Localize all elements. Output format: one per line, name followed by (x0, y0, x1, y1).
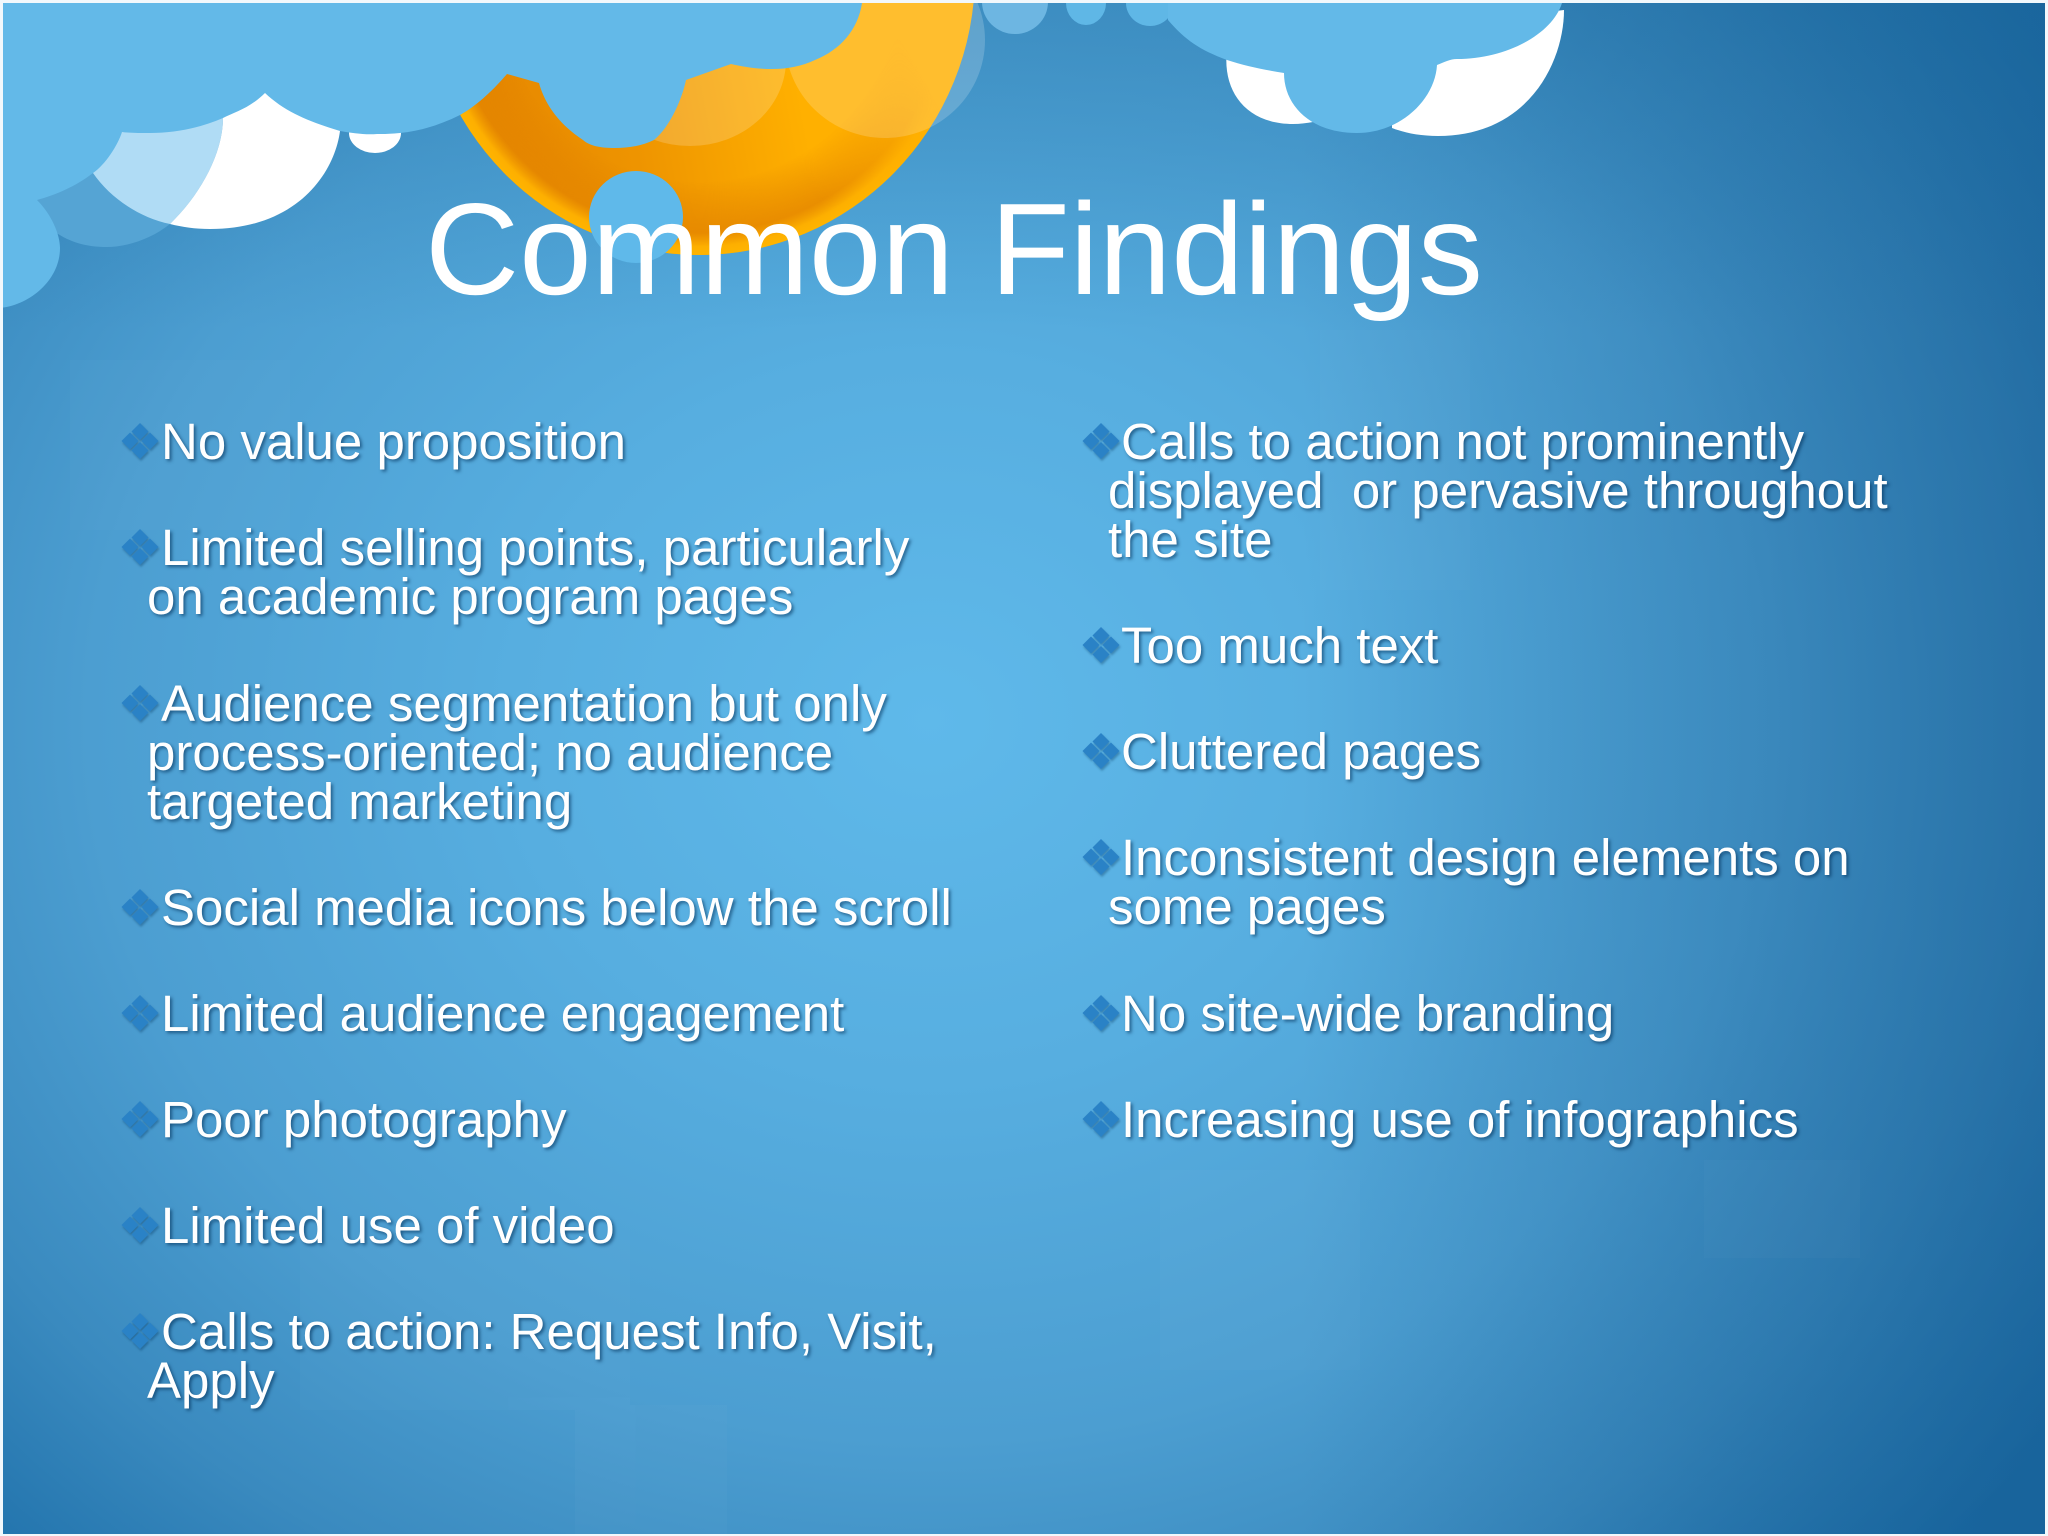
finding: no value proposition: No value proposition (161, 413, 626, 470)
finding: audience segmentation: Audience segmentation but only (161, 675, 887, 732)
finding: limited selling points: Limited selling points, particularly (161, 519, 909, 576)
finding: social media icons: Social media icons below the scroll (161, 879, 952, 936)
finding: limited selling points (122, 519, 912, 628)
finding: calls to action: Apply (147, 1352, 275, 1409)
right white cloud behind (1226, 10, 1564, 136)
finding: calls to action not prominent (1082, 413, 1890, 568)
finding: limited use of video: Limited use of video (161, 1197, 615, 1254)
finding: calls to action not prominent: Calls to action not prominently (1121, 413, 1804, 470)
panel: right findings list (1082, 413, 1890, 1152)
title: Common Findings (425, 176, 1483, 322)
finding: calls to action not prominent: displayed or pervasive throughout (1108, 462, 1888, 519)
finding: limited audience engagement: Limited audience engagement (161, 985, 844, 1042)
icon: sun (423, 0, 985, 255)
small round cloud over sun (589, 171, 683, 263)
finding: calls to action: Calls to action: Request Info, Visit, (161, 1303, 937, 1360)
finding: calls to action not prominent: the site (1108, 511, 1272, 568)
top-left blue cloud (0, 0, 862, 308)
finding: poor photography: Poor photography (161, 1091, 566, 1148)
finding: limited selling points: on academic program pages (147, 568, 793, 625)
finding: too much text: Too much text (1121, 617, 1438, 674)
finding: calls to action (122, 1303, 937, 1412)
finding: inconsistent design elements: Inconsistent design elements on (1121, 829, 1850, 886)
finding: audience segmentation: targeted marketing (147, 773, 572, 830)
finding: cluttered pages: Cluttered pages (1121, 723, 1481, 780)
finding: inconsistent design elements (1082, 829, 1850, 938)
finding: audience segmentation (122, 675, 890, 834)
left white cloud behind (20, 80, 401, 247)
finding: no site-wide branding: No site-wide branding (1121, 985, 1614, 1042)
top small cloud puffs (982, 0, 1174, 34)
finding: audience segmentation: process-oriented; no audience (147, 724, 833, 781)
top-right blue cloud (1168, 0, 1562, 133)
panel: left findings list (122, 413, 952, 1412)
finding: increasing use of infographics: Increasing use of infographics (1121, 1091, 1799, 1148)
finding: inconsistent design elements: some pages (1108, 878, 1386, 935)
